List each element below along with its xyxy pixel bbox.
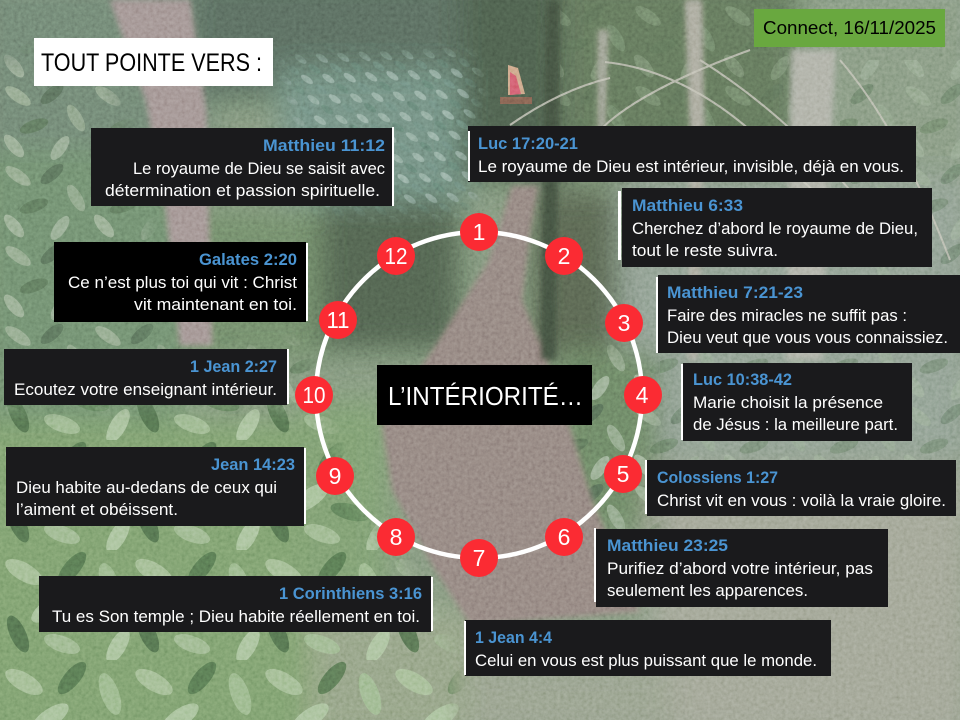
- panel: Matthieu 11:12: détermination et passion spirituelle.: [105, 181, 380, 200]
- panel: Matthieu 11:12: Le royaume de Dieu se saisit avec: [133, 159, 385, 178]
- panel: Matthieu 6:33: Matthieu 6:33: [632, 196, 743, 215]
- badge 11: [319, 301, 357, 339]
- panel: Galates 2:20: vit maintenant en toi.: [134, 295, 297, 314]
- badge 10: 10: [302, 382, 326, 408]
- panel: Galates 2:20: Galates 2:20: [199, 250, 297, 269]
- panel: Matthieu 23:25: seulement les apparences.: [607, 581, 808, 600]
- panel: Luc 17:20-21: Le royaume de Dieu est intérieur, invisible, déjà en vous.: [478, 157, 904, 176]
- panel: Matthieu 7:21-23: Dieu veut que vous vous connaissiez.: [667, 328, 948, 347]
- panel: Jean 14:23: Dieu habite au-dedans de ceux qui: [16, 478, 277, 497]
- panel: Galates 2:20: Ce n’est plus toi qui vit : Christ: [68, 273, 297, 292]
- badge 3: 3: [618, 310, 630, 336]
- panel: 1 Jean 4:4: [464, 620, 831, 676]
- badge 5: 5: [617, 461, 629, 487]
- badge 4: 4: [636, 382, 649, 408]
- badge 1: 1: [473, 219, 485, 245]
- panel: Colossiens 1:27: Christ vit en vous : voilà la vraie gloire.: [657, 491, 946, 510]
- badge 8: [377, 518, 415, 556]
- panel: 1 Jean 2:27: 1 Jean 2:27: [190, 357, 277, 376]
- panel: 1 Jean 4:4: 1 Jean 4:4: [475, 628, 553, 647]
- badge 10: [295, 376, 333, 414]
- heading: tout pointe vers: TOUT POINTE VERS :: [41, 49, 262, 77]
- panel: 1 Jean 4:4: Celui en vous est plus puissant que le monde.: [475, 651, 817, 670]
- badge 9: [316, 457, 354, 495]
- panel: Colossiens 1:27: Colossiens 1:27: [657, 468, 778, 487]
- panel: Matthieu 6:33: Cherchez d’abord le royaume de Dieu,: [632, 219, 918, 238]
- panel: Luc 17:20-21: Luc 17:20-21: [478, 134, 578, 153]
- ring of twelve points: [295, 213, 662, 577]
- panel: Luc 17:20-21: [468, 126, 916, 182]
- panel: Luc 10:38-42: Marie choisit la présence: [693, 393, 883, 412]
- badge 7: [460, 539, 498, 577]
- badge 6: 6: [558, 524, 570, 550]
- badge 1: [460, 213, 498, 251]
- panel: 1 Jean 2:27: [4, 349, 289, 405]
- badge 8: 8: [390, 524, 402, 550]
- centre title: [377, 365, 592, 425]
- badge 6: [545, 518, 583, 556]
- panel: Matthieu 11:12: [91, 127, 394, 206]
- badge 12: 12: [384, 243, 408, 269]
- path and tree trunks: [110, 0, 836, 625]
- panel: Luc 10:38-42: de Jésus : la meilleure part.: [693, 415, 898, 434]
- badge 9: 9: [329, 463, 341, 489]
- panel: Matthieu 7:21-23: Faire des miracles ne suffit pas :: [667, 306, 907, 325]
- panel: Matthieu 11:12: Matthieu 11:12: [263, 136, 385, 155]
- panel: Matthieu 7:21-23: [656, 275, 960, 353]
- panel: 1 Corinthiens 3:16: [39, 576, 433, 632]
- date tag: Connect, 16/11/2025: [763, 18, 936, 38]
- heading: tout pointe vers: [34, 38, 273, 86]
- badge 7: 7: [473, 545, 485, 571]
- panel: Matthieu 23:25: Matthieu 23:25: [607, 536, 728, 555]
- badge 2: 2: [558, 243, 570, 269]
- panel: Luc 10:38-42: [681, 363, 912, 441]
- panel: Colossiens 1:27: [645, 460, 956, 516]
- badge 3: [605, 304, 643, 342]
- badge 4: [624, 376, 662, 414]
- badge 11: 11: [326, 307, 350, 333]
- panel: Matthieu 7:21-23: Matthieu 7:21-23: [667, 283, 803, 302]
- bare branches: [510, 50, 950, 260]
- panel: 1 Jean 2:27: Ecoutez votre enseignant intérieur.: [14, 380, 277, 399]
- date tag: [754, 9, 945, 47]
- badge 2: [545, 237, 583, 275]
- panel: Matthieu 6:33: [618, 188, 932, 267]
- panel: 1 Corinthiens 3:16: 1 Corinthiens 3:16: [279, 584, 422, 603]
- panel: Matthieu 6:33: tout le reste suivra.: [632, 241, 778, 260]
- badge 12: [377, 237, 415, 275]
- ring circle: [316, 232, 642, 558]
- centre title: L’INTÉRIORITÉ…: [388, 381, 583, 411]
- panel: Galates 2:20: [54, 242, 308, 322]
- panel: 1 Corinthiens 3:16: Tu es Son temple ; Dieu habite réellement en toi.: [52, 607, 420, 626]
- panel: Jean 14:23: l’aiment et obéissent.: [16, 500, 178, 519]
- panel: Luc 10:38-42: Luc 10:38-42: [693, 370, 792, 389]
- panel: Matthieu 23:25: Purifiez d’abord votre intérieur, pas: [607, 559, 873, 578]
- badge 5: [604, 455, 642, 493]
- red structure in the distance: [500, 65, 532, 104]
- panel: Jean 14:23: Jean 14:23: [211, 455, 295, 474]
- panel: Jean 14:23: [6, 447, 306, 526]
- panel: Matthieu 23:25: [594, 528, 888, 607]
